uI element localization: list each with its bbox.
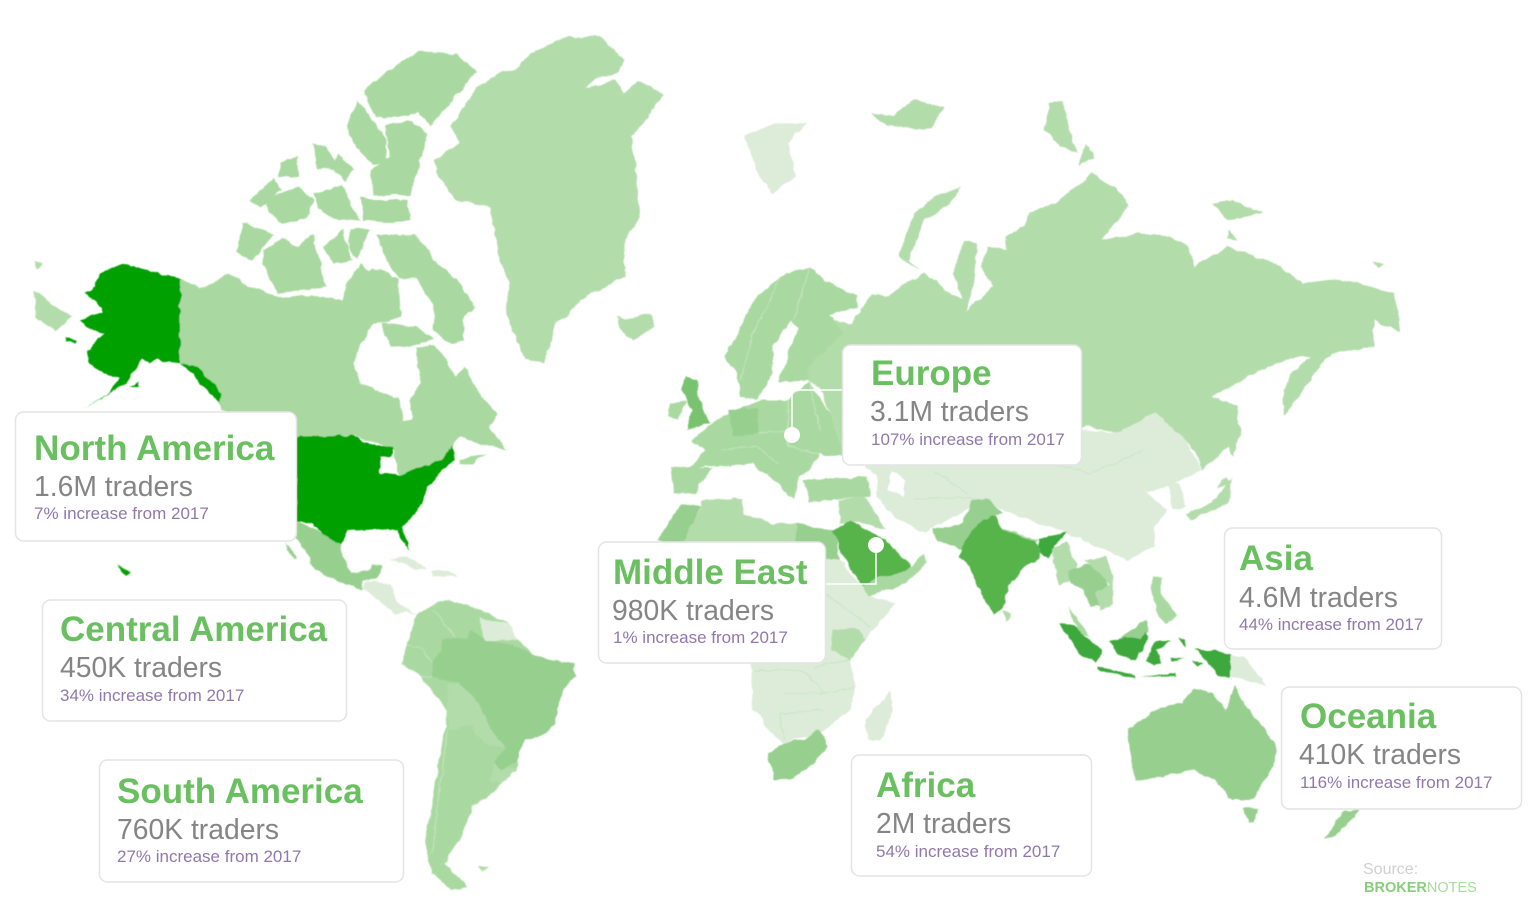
card: Middle East: 1% increase from 2017 [613, 628, 788, 647]
region: Arctic archipelagos [872, 100, 1384, 270]
card: Middle East: 980K traders [612, 594, 774, 626]
region: Germany and Central Europe [728, 408, 760, 437]
source credit [1363, 861, 1477, 896]
region: Contiguous United States [296, 435, 455, 550]
card: South America: 760K traders [117, 813, 279, 845]
region: Caspian Sea [888, 470, 906, 497]
region: Madagascar [865, 690, 893, 742]
card: Africa [852, 755, 1092, 876]
region: United Kingdom [681, 377, 710, 430]
region: Svalbard [744, 123, 807, 193]
map: North America and Greenland [35, 37, 663, 550]
region: Atlantic Canada [460, 453, 486, 465]
card: Africa: 54% increase from 2017 [876, 842, 1060, 861]
region: Iraq and Syria [840, 497, 886, 528]
card: Oceania: Oceania [1300, 697, 1437, 736]
card: South America [100, 760, 404, 882]
card: Central America: 450K traders [60, 651, 222, 683]
pin: Middle East [825, 537, 884, 584]
card: Asia: 44% increase from 2017 [1239, 615, 1423, 634]
region: Russia [807, 173, 1400, 470]
region: Japan [1186, 477, 1233, 520]
card: Central America: 34% increase from 2017 [60, 686, 244, 705]
region: Bangladesh [1039, 532, 1067, 558]
card: South America: South America [117, 772, 363, 811]
region: Sakhalin [1228, 407, 1241, 457]
card: Oceania: 116% increase from 2017 [1300, 773, 1492, 792]
region: India [960, 515, 1039, 615]
region: Korea [1167, 483, 1186, 510]
region: Morocco [656, 503, 699, 543]
region: Canadian Arctic islands [236, 52, 477, 347]
region: Guianas [478, 618, 519, 640]
region: Thailand [1067, 563, 1110, 607]
region: South America landmass [402, 600, 576, 890]
card: Oceania [1282, 687, 1522, 809]
region: Philippines [1151, 577, 1177, 623]
card: North America: 7% increase from 2017 [34, 504, 209, 523]
region: Malay Peninsula [1069, 607, 1090, 637]
region: Uruguay [490, 763, 517, 783]
region: Greenland [434, 37, 663, 363]
region: Far-east Russia tip [35, 260, 72, 332]
card: South America: 27% increase from 2017 [117, 847, 301, 866]
map: Mexico, Central and South America [119, 522, 576, 890]
card: Europe: Europe [871, 354, 992, 393]
card: Africa: 2M traders [876, 807, 1011, 839]
region: Australia [1128, 685, 1276, 800]
region: South Africa [768, 728, 827, 780]
card: Oceania: 410K traders [1299, 738, 1461, 770]
source credit: BROKERNOTES [1364, 880, 1477, 896]
card: Asia [1224, 528, 1442, 649]
region: Egypt [796, 523, 840, 560]
region: Spain [671, 467, 712, 493]
region: Pakistan [932, 498, 1003, 552]
region: Sub-Saharan Africa [751, 560, 896, 743]
card: Middle East: Middle East [613, 553, 808, 592]
region: Yemen and Oman [863, 553, 927, 597]
region: Saudi Arabia [832, 520, 911, 587]
region: Indonesia [1059, 623, 1230, 678]
card: Central America: Central America [60, 610, 328, 649]
region: Tasmania [1243, 808, 1258, 823]
region: Mexico [285, 522, 383, 590]
region: Brazil [432, 630, 576, 770]
region: Malaysian Borneo [1115, 620, 1148, 640]
card: North America: 1.6M traders [34, 470, 193, 502]
region: Kenya [832, 628, 865, 660]
card: Europe: 107% increase from 2017 [871, 430, 1065, 449]
card: Asia: 4.6M traders [1239, 581, 1398, 613]
card: Middle East [598, 542, 826, 663]
region: China and Central Asia [862, 413, 1201, 560]
region: Canada [180, 263, 507, 477]
map: Africa, South Asia and Oceania [656, 497, 1360, 838]
region: Scandinavia [726, 267, 859, 400]
pin: Europe [784, 390, 842, 443]
region: Black Sea [809, 453, 862, 478]
card: Africa: Africa [876, 766, 976, 805]
region: Iceland [616, 313, 655, 340]
card: Central America [42, 600, 346, 721]
region: Continental Europe [689, 382, 846, 500]
region: Paraguay [475, 717, 505, 747]
region: New Zealand [1324, 810, 1360, 838]
region: Ireland [668, 400, 686, 420]
region: Papua New Guinea [1230, 655, 1266, 685]
region: Myanmar [1052, 540, 1077, 587]
source credit: Source: [1363, 861, 1418, 878]
region: Alaska [65, 263, 221, 410]
region: Bolivia [448, 683, 490, 730]
region: Vietnam [1085, 557, 1113, 610]
card: Europe: 3.1M traders [870, 395, 1029, 427]
card: North America [16, 412, 296, 541]
region: Sri Lanka [1003, 610, 1011, 623]
card: Europe [842, 345, 1082, 465]
map: Eurasia [668, 100, 1400, 560]
card: Asia: Asia [1239, 539, 1313, 578]
region: Turkey [804, 477, 872, 502]
region: Central America and Caribbean [362, 557, 459, 615]
region: Hawaii [119, 565, 130, 575]
region: Falkland Islands [478, 867, 490, 872]
region: North Africa [682, 498, 799, 563]
card: North America: North America [34, 429, 275, 468]
region: Nepal [1003, 528, 1039, 545]
